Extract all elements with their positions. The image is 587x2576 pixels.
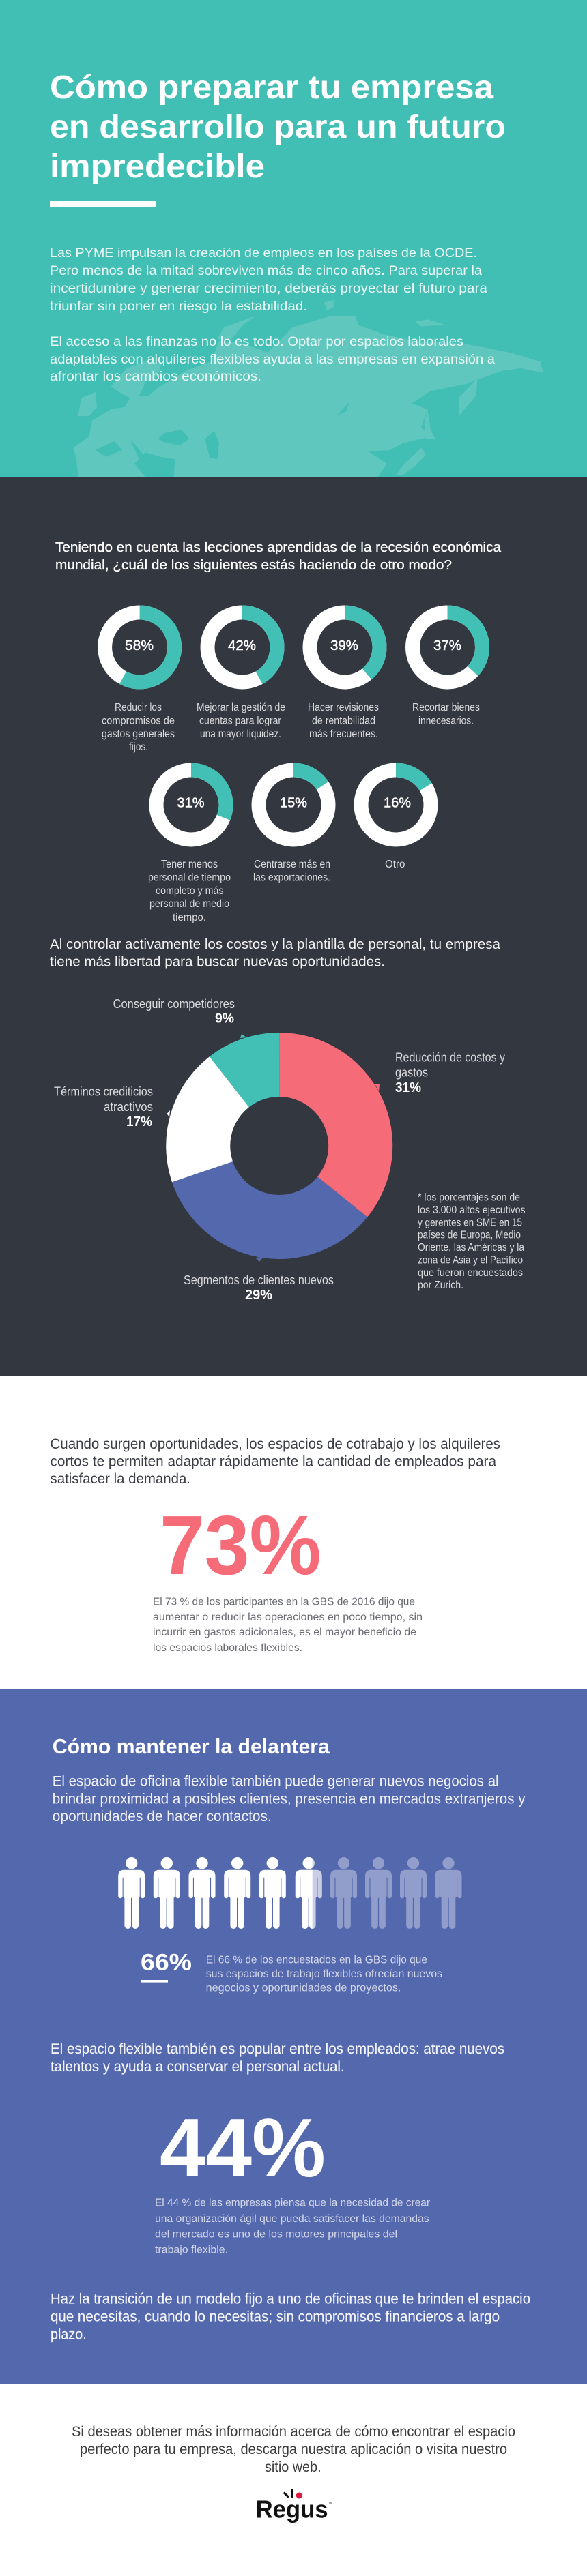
survey question heading: Teniendo en cuenta las lecciones aprendidas de la recesión económica — [55, 540, 502, 555]
label: 39%: Hacer revisiones — [308, 702, 379, 713]
flexible office text: oportunidades de hacer contactos. — [53, 1809, 272, 1824]
73% description: incurrir en gastos adicionales, es el mayor beneficio de — [153, 1627, 416, 1638]
big number: 73%: 73% — [160, 1499, 321, 1593]
label: 42%: una mayor liquidez. — [200, 728, 281, 740]
title underline — [50, 201, 156, 207]
intro text: El acceso a las finanzas no lo es todo. Optar por espacios laborales — [50, 334, 463, 349]
label: 15%: las exportaciones. — [253, 872, 330, 884]
intro text — [50, 246, 495, 384]
66% description — [206, 1954, 442, 1994]
pie chart: opportunities — [166, 1033, 392, 1262]
donut: 58%: 58% — [125, 638, 154, 653]
panel: intro — [0, 0, 587, 477]
pie label: 31%: gastos — [395, 1066, 428, 1080]
transition statement: que necesitas, cuando lo necesitas; sin compromisos financieros a largo — [51, 2309, 500, 2325]
label: 31%: tiempo. — [173, 912, 206, 923]
panel: staying ahead — [0, 1689, 587, 2384]
transition statement: Haz la transición de un modelo fijo a uno de oficinas que te brinden el espacio — [51, 2291, 530, 2307]
survey question heading: mundial, ¿cuál de los siguientes estás haciendo de otro modo? — [55, 558, 452, 573]
title: impredecible — [50, 149, 265, 185]
label: 39%: más frecuentes. — [309, 728, 378, 740]
label: 42%: Mejorar la gestión de — [197, 702, 285, 713]
pie label: 29%: Segmentos de clientes nuevos — [184, 1273, 334, 1287]
footer text — [72, 2424, 515, 2475]
footnote: países de Europa, Medio — [418, 1230, 521, 1241]
costs statement: tiene más libertad para buscar nuevas oportunidades. — [50, 953, 385, 970]
label: 31%: completo y más — [156, 885, 224, 897]
pie label: 17%: Términos crediticios — [54, 1084, 153, 1098]
donut: 31% — [156, 770, 226, 840]
coworking statement: satisfacer la demanda. — [51, 1471, 190, 1487]
title: Cómo preparar tu empresa — [50, 70, 493, 106]
intro text: incertidumbre y generar crecimiento, deberás proyectar el futuro para — [50, 281, 487, 296]
intro text: adaptables con alquileres flexibles ayuda a las empresas en expansión a — [50, 352, 495, 367]
footnote: Oriente, las Américas y la — [418, 1242, 524, 1254]
flexible office text: El espacio de oficina flexible también puede generar nuevos negocios al — [53, 1774, 499, 1790]
pie label: 17%: 17% — [126, 1114, 152, 1129]
flexible office text: brindar proximidad a posibles clientes, presencia en mercados extranjeros y — [53, 1791, 526, 1807]
people pictogram: 66 percent — [118, 1857, 461, 1929]
donut: 16%: 16% — [384, 795, 411, 810]
pie label: 17% — [54, 1084, 153, 1129]
donut: 15% — [259, 770, 328, 840]
footnote — [418, 1192, 526, 1291]
66% description: sus espacios de trabajo flexibles ofrecían nuevos — [206, 1968, 442, 1980]
pie label: 31%: 31% — [395, 1080, 421, 1095]
flexible office text — [53, 1774, 526, 1824]
big number: 44%: 44% — [160, 2101, 326, 2194]
label: 58% — [102, 702, 175, 753]
66% description: negocios y oportunidades de proyectos. — [206, 1982, 401, 1994]
intro text: Pero menos de la mitad sobreviven más de cinco años. Para superar la — [50, 263, 482, 278]
coworking statement — [51, 1436, 500, 1487]
44% description: del mercado es uno de los motores principales del — [155, 2228, 397, 2240]
44% description: una organización ágil que pueda satisfacer las demandas — [155, 2213, 429, 2225]
44% description: trabajo flexible. — [155, 2244, 228, 2255]
footnote: zona de Asia y el Pacífico — [418, 1254, 523, 1266]
label: 37% — [412, 702, 480, 727]
label: 58%: compromisos de — [102, 715, 175, 727]
employees statement — [51, 2041, 504, 2075]
donut: 42%: 42% — [228, 638, 256, 653]
donut: 16% — [361, 770, 431, 840]
label: 42% — [197, 702, 285, 740]
66% description: El 66 % de los encuestados en la GBS dijo que — [206, 1954, 427, 1966]
title: en desarrollo para un futuro — [50, 109, 506, 145]
44% description: El 44 % de las empresas piensa que la necesidad de crear — [155, 2197, 431, 2208]
label: 37%: innecesarios. — [418, 715, 474, 727]
coworking statement: Cuando surgen oportunidades, los espacios de cotrabajo y los alquileres — [51, 1436, 500, 1452]
pie label: 17%: atractivos — [104, 1100, 153, 1114]
panel: survey — [0, 477, 587, 1376]
label: 58%: Reducir los — [115, 702, 162, 713]
costs statement — [50, 936, 501, 970]
footer text: sitio web. — [265, 2459, 321, 2475]
footnote: * los porcentajes son de — [418, 1192, 520, 1204]
costs statement: Al controlar activamente los costos y la plantilla de personal, tu empresa — [50, 936, 501, 952]
intro text: Las PYME impulsan la creación de empleos en los países de la OCDE. — [50, 246, 477, 261]
title — [50, 70, 506, 185]
pie label: 31%: Reducción de costos y — [395, 1051, 505, 1065]
section heading: Cómo mantener la delantera — [53, 1734, 330, 1758]
label: 42%: cuentas para lograr — [199, 715, 281, 727]
73% description: aumentar o reducir las operaciones en poco tiempo, sin — [153, 1612, 423, 1623]
73% description — [153, 1596, 423, 1654]
label: 15% — [253, 859, 330, 884]
pie label: 9%: Conseguir competidores — [113, 997, 235, 1011]
label: 31%: personal de tiempo — [148, 872, 231, 884]
pie label: 9% — [113, 997, 235, 1026]
donut: 39% — [310, 612, 380, 682]
label: 58%: gastos generales — [102, 728, 175, 740]
label: 37%: Recortar bienes — [412, 702, 480, 713]
footer text: Si deseas obtener más información acerca de cómo encontrar el espacio — [72, 2424, 515, 2440]
label: 15%: Centrarse más en — [254, 859, 330, 870]
footnote: que fueron encuestados — [418, 1267, 523, 1279]
donut: 37%: 37% — [433, 638, 461, 653]
employees statement: El espacio flexible también es popular entre los empleados: atrae nuevos — [51, 2041, 504, 2057]
label: 39% — [308, 702, 379, 740]
label: 31% — [148, 859, 231, 923]
73% description: El 73 % de los participantes en la GBS de 2016 dijo que — [153, 1596, 415, 1608]
73% description: los espacios laborales flexibles. — [153, 1642, 302, 1654]
pie label: 29% — [184, 1273, 334, 1303]
pie label: 29%: 29% — [245, 1288, 272, 1303]
footnote: los 3.000 altos ejecutivos — [418, 1204, 526, 1216]
transition statement — [51, 2291, 530, 2343]
donut: 37% — [412, 612, 482, 682]
footnote: por Zurich. — [418, 1279, 463, 1291]
44% description — [155, 2197, 431, 2255]
donut: 31%: 31% — [177, 795, 205, 810]
label: 58%: fijos. — [129, 741, 148, 753]
intro text: triunfar sin poner en riesgo la estabilidad. — [50, 299, 307, 314]
logo: Regus: Regus — [256, 2495, 328, 2523]
coworking statement: cortos te permiten adaptar rápidamente la cantidad de empleados para — [51, 1454, 496, 1469]
survey question heading — [55, 540, 502, 573]
pie label: 9%: 9% — [215, 1011, 234, 1026]
panel: flexibility stat — [51, 1436, 500, 1654]
footer text: perfecto para tu empresa, descarga nuestra aplicación o visita nuestro — [80, 2442, 507, 2457]
donut: 39%: 39% — [330, 638, 358, 653]
pie label: 31% — [395, 1051, 505, 1095]
donut: 42% — [207, 612, 277, 682]
label: 31%: Tener menos — [161, 859, 218, 870]
donut: 58% — [105, 612, 175, 682]
footnote: y gerentes en SME en 15 — [418, 1217, 522, 1228]
intro text: afrontar los cambios económicos. — [50, 369, 261, 384]
label: 16%: Otro — [385, 859, 405, 870]
logo: Regus: TM — [328, 2501, 332, 2504]
world map backdrop — [74, 300, 543, 477]
label: 39%: de rentabilidad — [312, 715, 375, 727]
donut: 15%: 15% — [280, 795, 307, 810]
stat: 66%: 66% — [141, 1950, 192, 1976]
employees statement: talentos y ayuda a conservar el personal actual. — [51, 2058, 345, 2075]
transition statement: plazo. — [51, 2326, 87, 2343]
label: 31%: personal de medio — [149, 898, 229, 910]
